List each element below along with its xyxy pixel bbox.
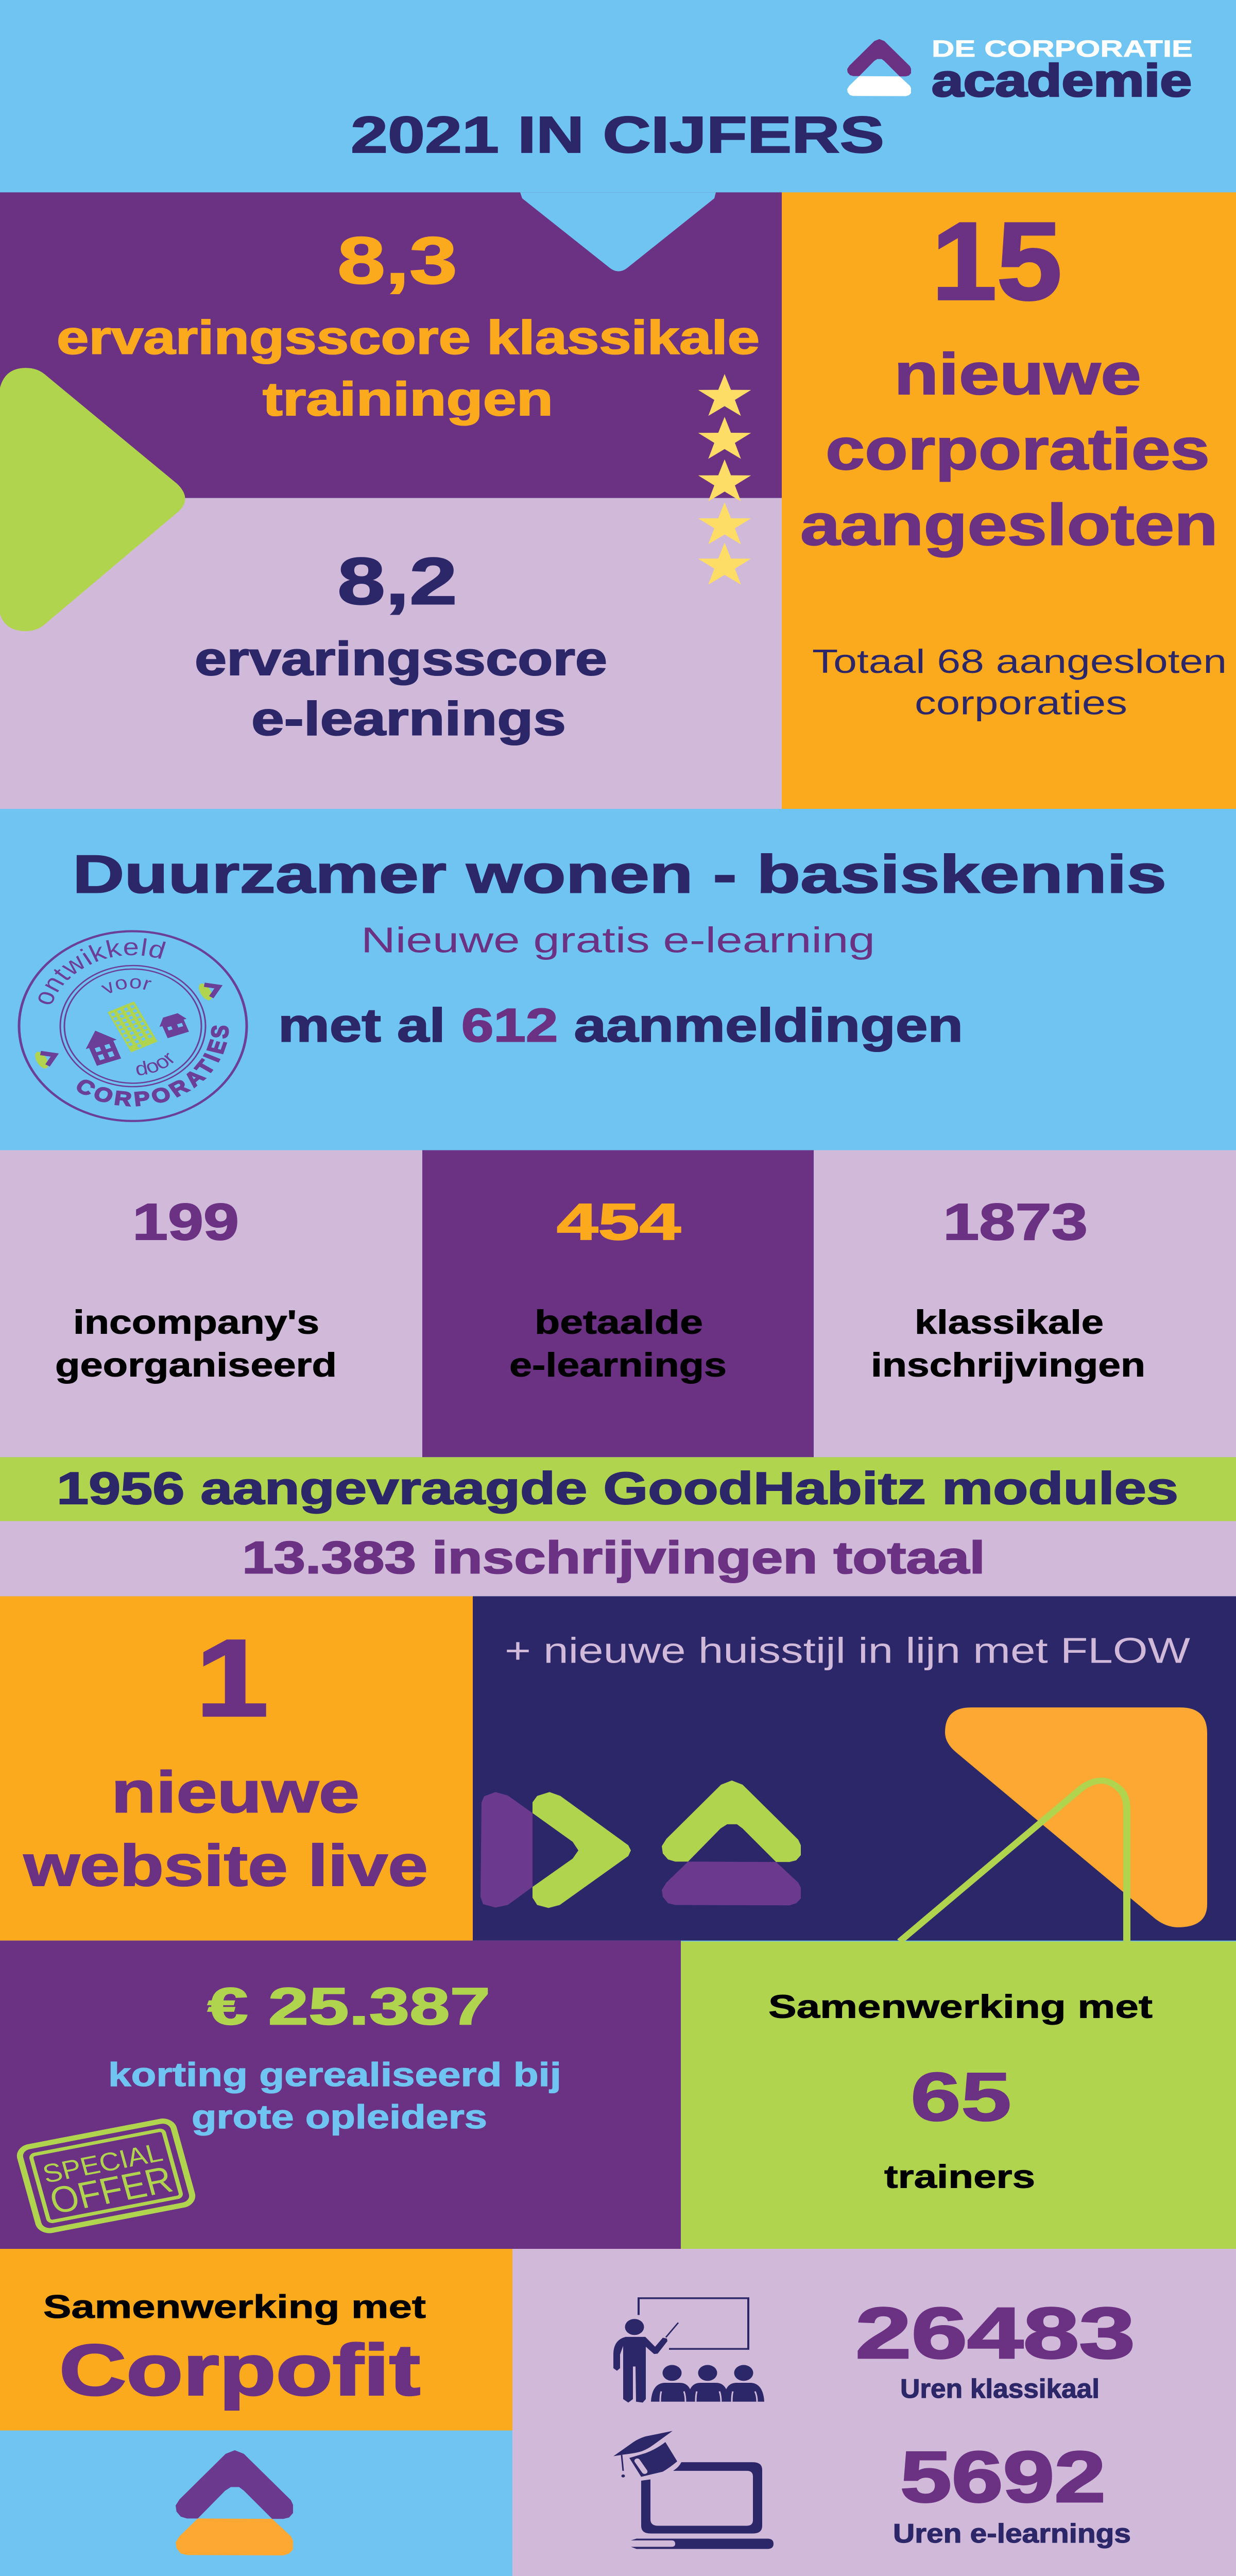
title: 2021 IN CIJFERS	[351, 106, 884, 164]
label: nieuwe website live: nieuwe	[111, 1759, 359, 1825]
number: 25.387 euro: € 25.387	[208, 1977, 490, 2036]
label: korting gerealiseerd: korting gerealiseerd bij	[108, 2056, 561, 2094]
panel: logo mark bottom	[0, 2431, 512, 2576]
panel: nieuwe huisstijl	[473, 1596, 1236, 1941]
panel: score classroom trainings	[0, 192, 782, 498]
label: betaalde e-learnings	[509, 1303, 727, 1384]
name: Corpofit: Corpofit	[59, 2330, 420, 2410]
label: nieuwe corporaties aangesloten: nieuwe	[894, 342, 1141, 406]
label: ervaringsscore klassikale trainingen: trainingen	[263, 372, 553, 426]
label: nieuwe corporaties aangesloten: corporaties	[826, 417, 1210, 482]
stamp: ontwikkeld voor en door corporaties: door	[136, 1053, 174, 1076]
heading: Duurzamer wonen - basiskennis	[73, 844, 1166, 904]
banner: GoodHabitz modules	[0, 1457, 1236, 1521]
label: ervaringsscore e-learnings	[195, 633, 607, 745]
icon: play arrow mark	[480, 1792, 631, 1908]
panel: klassikale inschrijvingen	[814, 1150, 1236, 1457]
label: ervaringsscore klassikale trainingen	[57, 311, 760, 426]
text: nieuwe huisstijl: + nieuwe huisstijl in lijn met FLOW	[505, 1631, 1190, 1671]
number: 454: 454	[557, 1193, 681, 1251]
label: incompany's georganiseerd	[55, 1303, 337, 1384]
icon: five stars	[698, 374, 751, 585]
label: korting gerealiseerd	[108, 2056, 561, 2136]
number: 5692: 5692	[900, 2436, 1106, 2517]
number: 199: 199	[132, 1193, 239, 1251]
stamp: ontwikkeld voor en door corporaties	[18, 930, 248, 1122]
label: klassikale inschrijvingen	[871, 1303, 1145, 1384]
label: nieuwe corporaties aangesloten: aangesloten	[800, 492, 1218, 557]
text: totaal aangesloten corporaties	[812, 643, 1227, 722]
banner: inschrijvingen totaal	[0, 1521, 1236, 1596]
number: 26483: 26483	[855, 2293, 1135, 2374]
icon: small arrow bottom left	[32, 1047, 59, 1070]
label: trainers: trainers	[884, 2159, 1035, 2195]
number: 1873: 1873	[943, 1193, 1088, 1251]
text: totaal aangesloten corporaties: corporaties	[915, 685, 1127, 722]
number: 65: 65	[911, 2059, 1011, 2136]
panel: Duurzamer wonen e-learning	[18, 844, 1166, 1122]
label: incompany's georganiseerd: incompany's	[73, 1303, 319, 1341]
label: nieuwe corporaties aangesloten	[800, 342, 1218, 557]
number: 8,2: 8,2	[337, 545, 457, 619]
text: totaal aangesloten corporaties: Totaal 68 aangesloten	[812, 643, 1227, 680]
panel: new corporations	[782, 192, 1236, 809]
icon: large orange arrow	[945, 1707, 1207, 1927]
banner: GoodHabitz modules: 1956 aangevraagde GoodHabitz modules	[57, 1463, 1178, 1514]
number: 1: 1	[196, 1617, 268, 1739]
icon: teacher with students	[613, 2298, 764, 2402]
label: samenwerking met: Samenwerking met	[43, 2289, 426, 2325]
icon: small arrow top right	[196, 978, 223, 1002]
label: betaalde e-learnings: betaalde	[535, 1303, 703, 1341]
label: klassikale inschrijvingen: inschrijvingen	[871, 1347, 1145, 1384]
banner: inschrijvingen totaal: 13.383 inschrijvingen totaal	[242, 1532, 985, 1583]
stamp: ontwikkeld voor en door corporaties: CORPORATIES	[77, 1025, 229, 1107]
label: korting gerealiseerd: grote opleiders	[192, 2098, 487, 2136]
stamp: special offer: OFFER	[45, 2158, 177, 2222]
label: klassikale inschrijvingen: klassikale	[915, 1303, 1104, 1341]
icon: apartment tower	[108, 1002, 158, 1053]
label: nieuwe website live	[23, 1759, 428, 1898]
label: uren klassikaal: Uren klassikaal	[900, 2374, 1100, 2404]
notch arrow pointing down	[520, 192, 716, 272]
stamp: ontwikkeld voor en door corporaties: ontwikkeld	[38, 938, 166, 1005]
subheading: Nieuwe gratis e-learning	[361, 920, 875, 960]
label: ervaringsscore e-learnings: ervaringsscore	[195, 633, 607, 685]
text: 612 aanmeldingen: met al 612 aanmeldingen	[278, 999, 963, 1052]
green arrow pointing right	[0, 368, 185, 631]
logo: De Corporatie Academie: DE CORPORATIE	[932, 36, 1193, 62]
icon: house right	[156, 1011, 192, 1039]
label: nieuwe website live: website live	[23, 1833, 428, 1898]
icon: up arrow mark	[662, 1781, 801, 1905]
panel: nieuwe website	[0, 1596, 473, 1941]
stamp: ontwikkeld voor en door corporaties: voor	[101, 978, 151, 993]
logo: De Corporatie Academie	[847, 36, 1193, 106]
label: incompany's georganiseerd: georganiseerd	[55, 1347, 337, 1384]
stamp: special offer: SPECIAL	[40, 2138, 166, 2189]
label: ervaringsscore e-learnings: e-learnings	[251, 692, 566, 745]
panel: korting	[0, 1941, 681, 2249]
label: betaalde e-learnings: e-learnings	[509, 1347, 727, 1384]
decorative green line	[900, 1781, 1127, 1941]
number: 8,3: 8,3	[337, 224, 457, 298]
panel: score e-learnings	[0, 498, 782, 809]
label: samenwerking met: Samenwerking met	[768, 1989, 1153, 2025]
logo: De Corporatie Academie: academie	[932, 55, 1192, 106]
icon: logo mark	[847, 39, 911, 96]
label: ervaringsscore klassikale trainingen: ervaringsscore klassikale	[57, 311, 760, 364]
panel: Corpofit	[0, 2249, 512, 2431]
panel: incompany	[0, 1150, 422, 1457]
panel: trainers	[681, 1941, 1236, 2249]
header panel	[0, 0, 1236, 192]
stamp: special offer	[18, 2119, 195, 2232]
number: 15: 15	[932, 200, 1062, 323]
icon: logo mark	[176, 2450, 293, 2555]
icon: laptop with graduation cap	[613, 2431, 774, 2549]
icon: house left	[80, 1026, 125, 1067]
label: uren e-learnings: Uren e-learnings	[893, 2519, 1131, 2549]
panel: uren	[512, 2249, 1236, 2576]
panel: betaalde e-learnings	[422, 1150, 814, 1457]
